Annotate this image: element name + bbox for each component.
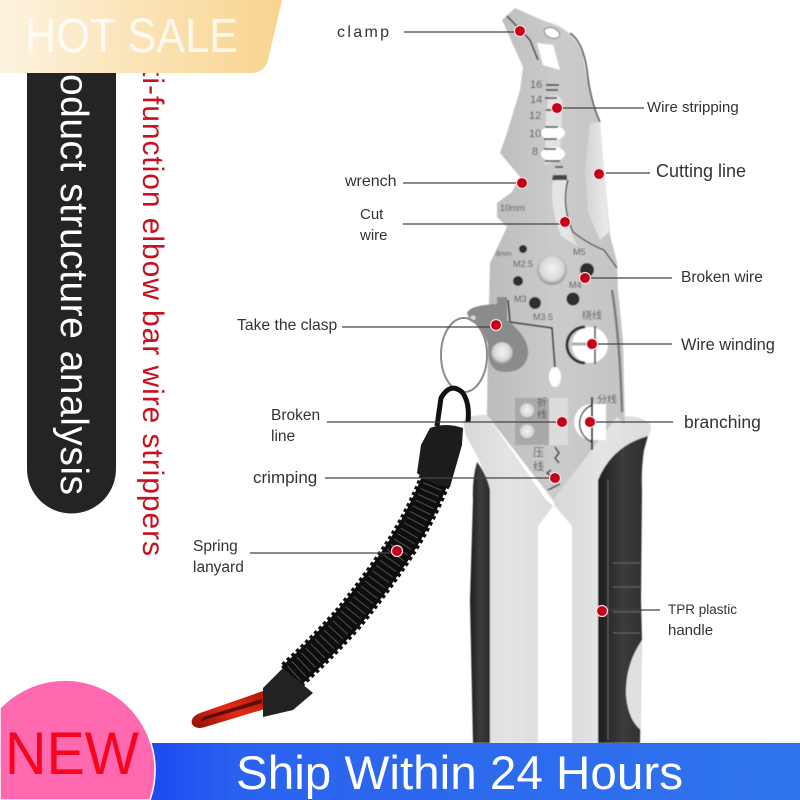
size labels (496, 203, 602, 322)
stripping gauge notches (541, 85, 567, 180)
size labels: M3.5 (533, 312, 553, 322)
new text: NEW (5, 720, 139, 787)
label: cut wire: Cut (360, 206, 383, 223)
jaw opening (537, 43, 560, 70)
label: spring lanyard: lanyard (193, 559, 244, 576)
gauge numbers: 12 (529, 110, 541, 122)
label: wrench: wrench (344, 173, 397, 190)
steel head of the pliers (487, 8, 625, 500)
size labels: M5 (573, 247, 586, 257)
right handle (553, 416, 651, 743)
label: branching: branching (684, 412, 761, 432)
label: TPR plastic handle: TPR plastic (668, 602, 737, 617)
size labels: M2.5 (513, 259, 533, 269)
red carabiner (192, 690, 268, 728)
blade seam (565, 180, 617, 268)
gauge numbers: 8 (532, 146, 538, 158)
branching hole: 分线 (597, 393, 617, 406)
shipping bar (140, 743, 800, 800)
cut-wire blade (552, 180, 577, 246)
badge: new (0, 680, 155, 800)
lanyard loop (437, 388, 468, 426)
outer edge (570, 33, 600, 122)
gauge numbers: 10 (529, 128, 541, 140)
label: wire stripping: Wire stripping (647, 99, 739, 116)
top cap (417, 425, 463, 487)
wire clasp (467, 297, 528, 372)
grip ribs (608, 480, 640, 740)
centre seam (508, 300, 555, 368)
label: spring lanyard: Spring (193, 538, 238, 555)
banner: hot sale (0, 0, 282, 73)
vertical subtitle: multi-function wire strippers: Multi-function elbow bar wire strippers (136, 17, 169, 556)
label: clamp: clamp (337, 24, 389, 41)
left black grip (470, 462, 490, 743)
coil (290, 480, 435, 677)
left handle (463, 415, 553, 743)
gauge numbers: 14 (530, 94, 542, 106)
label: cut wire: wire (359, 227, 388, 244)
crimping teeth: 压 (533, 446, 544, 459)
pivot bolt (537, 255, 567, 285)
size labels: 10mm (500, 203, 525, 213)
callout lines (250, 32, 673, 610)
label: broken wire: Broken wire (681, 269, 763, 286)
label: cutting line: Cutting line (656, 161, 746, 181)
label: wire winding: Wire winding (681, 336, 775, 354)
right black grip (598, 436, 648, 743)
size labels: M3 (514, 294, 527, 304)
grip window (626, 640, 642, 730)
crimping teeth: 线 (533, 459, 544, 473)
gauge holes (513, 245, 594, 309)
lower cap (263, 668, 313, 717)
wire-break panel (515, 396, 568, 445)
hot sale text: HOT SALE (25, 10, 238, 63)
callout dots (392, 26, 608, 616)
jaw hole (543, 26, 561, 40)
size labels: 8mm (496, 251, 512, 258)
vertical heading: product structure analysis: Product structure analysis (52, 34, 95, 495)
panel: product structure analysis pill (27, 34, 116, 514)
gauge numbers: 16 (530, 79, 542, 91)
crimping teeth (533, 446, 560, 490)
gauge numbers (529, 79, 542, 158)
label: broken line: Broken (271, 407, 320, 424)
wire stripper tool illustration (463, 8, 651, 743)
label: take the clasp: Take the clasp (237, 317, 338, 334)
centre notch (549, 367, 561, 387)
jaw seam (507, 16, 538, 60)
labels (193, 24, 775, 639)
branching hole (574, 393, 617, 450)
wire-winding hole (567, 326, 608, 364)
shipping text: Ship Within 24 Hours (236, 746, 683, 799)
side seam (612, 290, 622, 412)
wire-break panel: 折 (537, 396, 547, 409)
cutting blade (585, 122, 609, 240)
label: broken line: line (271, 428, 295, 445)
size labels: M4 (569, 280, 582, 290)
spring lanyard (192, 388, 468, 728)
label: TPR plastic handle: handle (668, 622, 713, 639)
wire-break panel: 线 (537, 408, 547, 421)
key ring (441, 318, 487, 392)
size labels: 绕线 (582, 309, 602, 322)
label: crimping: crimping (253, 468, 317, 487)
